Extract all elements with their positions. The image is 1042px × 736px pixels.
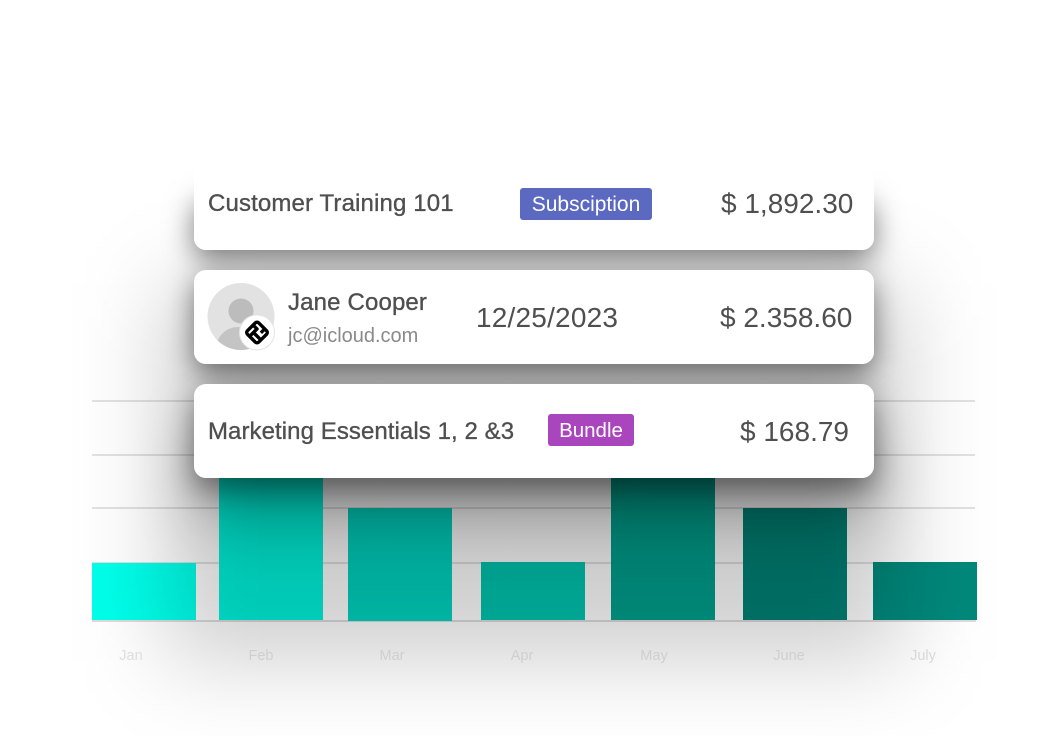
- month label: Feb: Feb: [248, 648, 274, 664]
- amount: $ 168.79: [740, 416, 849, 447]
- panel: Marketing Essentials card: [194, 384, 874, 478]
- panel: Jane Cooper card: [194, 270, 874, 364]
- course name: Customer Training 101: [208, 190, 454, 217]
- month label: Mar: Mar: [380, 648, 404, 664]
- badge: Subscription: [520, 188, 652, 220]
- logo badge: [240, 315, 274, 350]
- month label: May: May: [640, 648, 668, 664]
- name: Jane Cooper: [288, 289, 427, 316]
- amount: $ 2.358.60: [720, 302, 852, 333]
- month label: Jan: Jan: [119, 648, 143, 664]
- bar: Jan: [92, 563, 196, 620]
- bar: June: [743, 508, 846, 620]
- badge: Bundle: [548, 414, 634, 446]
- card shadow: top: [194, 192, 874, 250]
- amount: $ 1,892.30: [721, 188, 853, 219]
- card shadow: bottom: [194, 384, 874, 478]
- badge: Bundle: Bundle: [559, 419, 623, 442]
- course name: Marketing Essentials 1, 2 &3: [208, 418, 514, 445]
- month label: Apr: Apr: [511, 648, 533, 664]
- email: jc@icloud.com: [288, 325, 418, 347]
- month label: July: July: [910, 648, 936, 664]
- bar: Feb: [219, 470, 322, 620]
- date: 12/25/2023: [476, 302, 618, 333]
- card shadow: middle: [194, 270, 874, 364]
- month label: June: June: [773, 648, 805, 664]
- bar: May: [611, 470, 714, 620]
- bar: Apr: [481, 562, 584, 620]
- badge: Subscription: Subsciption: [532, 193, 640, 216]
- panel: Customer Training card: [194, 150, 874, 250]
- large soft shadow: [165, 285, 903, 660]
- bar: Mar: [348, 508, 452, 621]
- bar: July: [873, 562, 976, 620]
- avatar with logo badge: [208, 283, 275, 350]
- bar chart: [92, 400, 976, 622]
